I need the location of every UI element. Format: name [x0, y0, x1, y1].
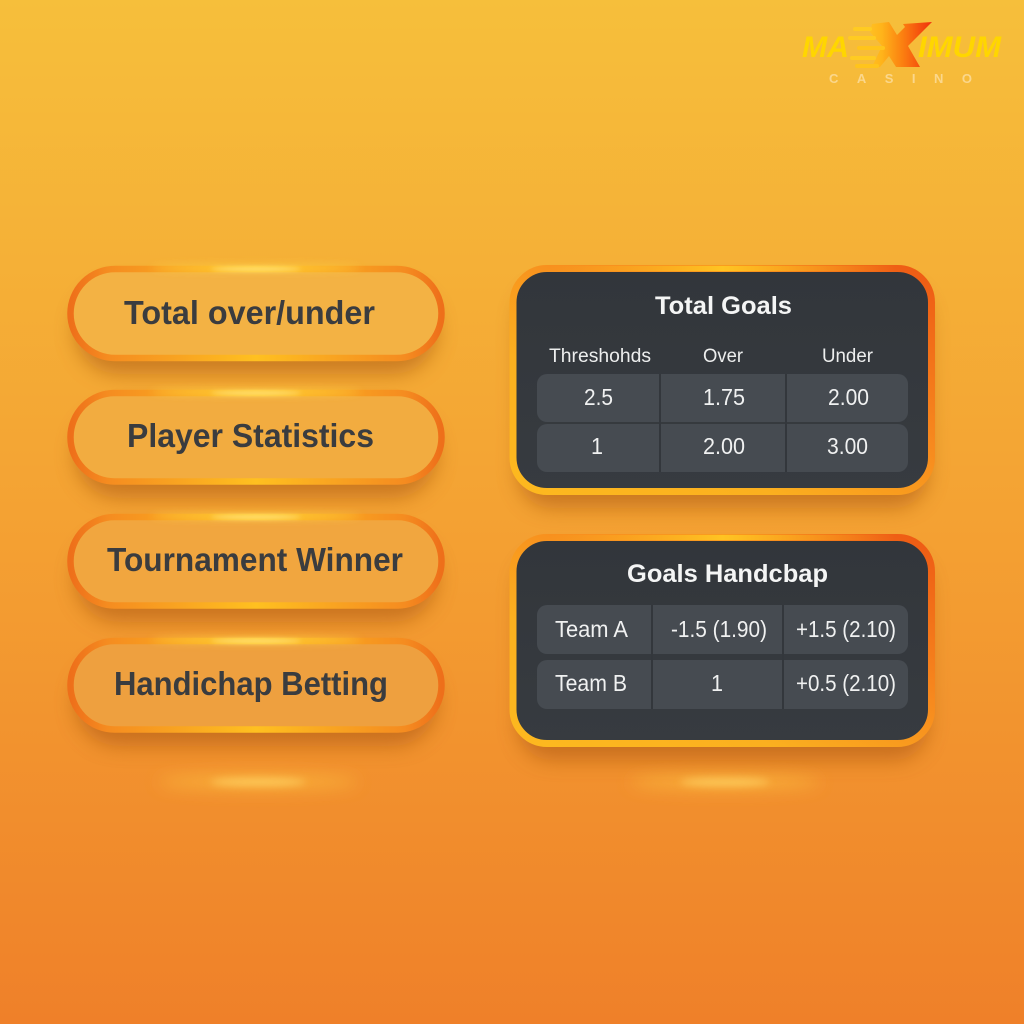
table rows: +1.5 (2.10) [796, 616, 896, 642]
table rows: 1.75 [703, 384, 745, 410]
table header: Over [703, 346, 744, 367]
heading: Goals Handcbap: Goals Handcbap [627, 560, 828, 588]
table rows: -1.5 (1.90) [671, 616, 767, 642]
pill: Tournament Winner: Tournament Winner [107, 541, 403, 578]
panel: Total Goals [513, 266, 932, 508]
pill: Tournament Winner [70, 512, 442, 622]
pill: Handichap Betting [70, 636, 442, 746]
pill: Total over/under: Total over/under [124, 294, 375, 331]
table rows: 2.00 [828, 384, 869, 410]
table rows: 2.5 [584, 384, 613, 410]
table header: Under [822, 346, 874, 367]
logo: Maximum Casino: CASINO [829, 71, 972, 86]
table rows: +0.5 (2.10) [796, 670, 896, 696]
glow under cards [630, 774, 820, 790]
heading: Total Goals: Total Goals [655, 292, 792, 320]
logo: Maximum Casino: MA [802, 31, 849, 64]
pill: Total over/under [70, 264, 442, 374]
table rows: 3.00 [827, 433, 868, 459]
table rows: Team A [555, 616, 629, 642]
table rows: Team B [555, 670, 627, 696]
table rows: 1 [591, 433, 603, 459]
glow under pills [158, 774, 358, 790]
table header [549, 346, 874, 367]
table rows [537, 374, 908, 472]
pill: Handichap Betting: Handichap Betting [114, 665, 388, 702]
panel: Goals Handicap [513, 534, 932, 760]
pill: Player Statistics [70, 388, 442, 498]
logo: Maximum Casino: IMUM [918, 31, 1002, 64]
table rows: 1 [711, 670, 723, 696]
logo: Maximum Casino [802, 22, 1002, 86]
table rows [537, 605, 908, 709]
table header: Threshohds [549, 346, 651, 367]
pill: Player Statistics: Player Statistics [127, 417, 374, 454]
table rows: 2.00 [703, 433, 745, 459]
